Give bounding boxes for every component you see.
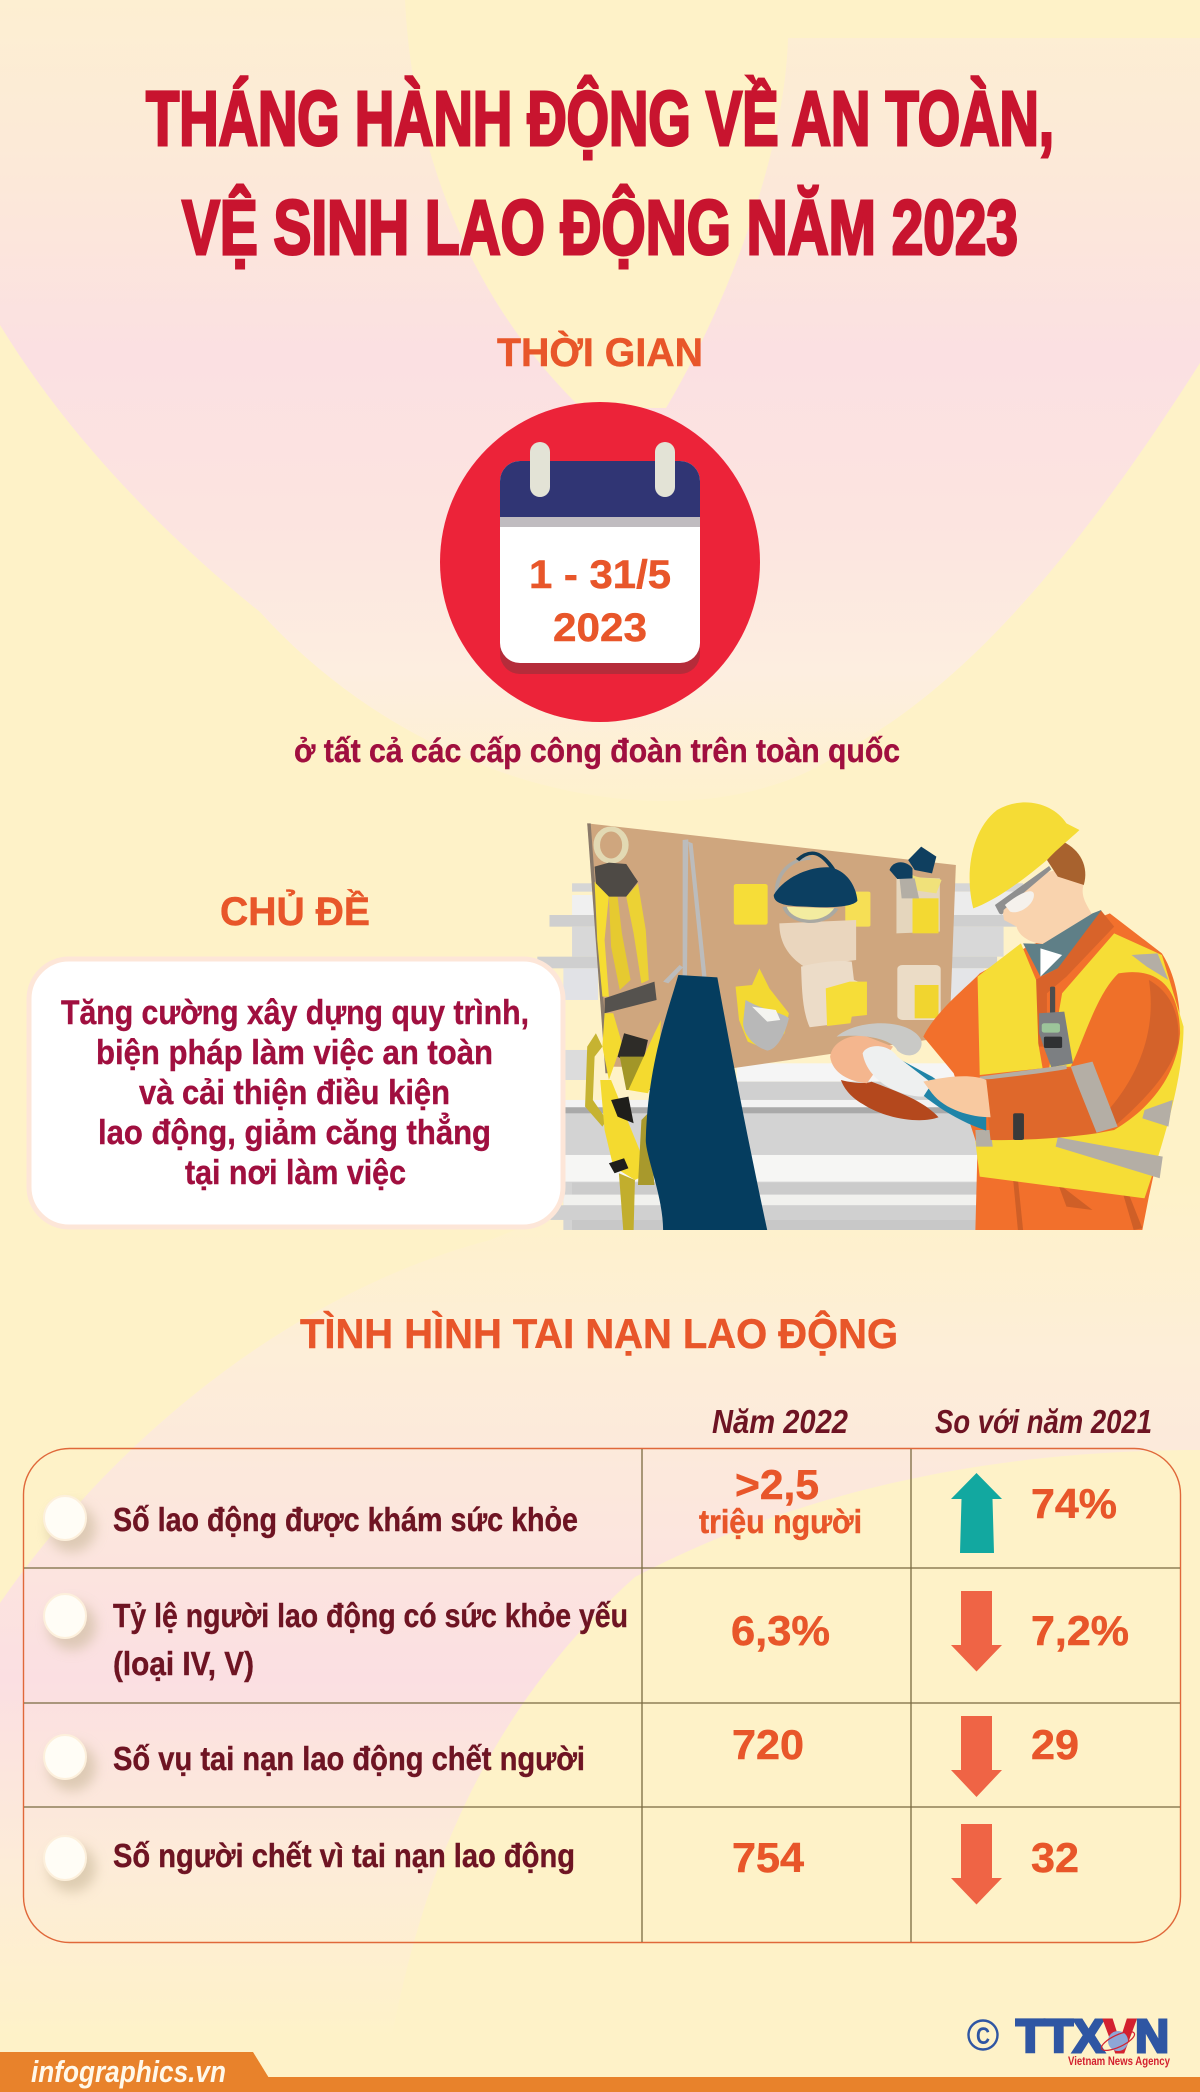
- hair: [1047, 842, 1085, 885]
- footer bar: [0, 2052, 1200, 2092]
- row 1: số lao động được khám sức khỏe: >2,5: [735, 1461, 819, 1508]
- logo: TTXVN: Vietnam News Agency: [1068, 2054, 1170, 2068]
- panel: theme text: tại nơi làm việc: [185, 1154, 406, 1192]
- vest left: [978, 943, 1043, 1075]
- panel: theme text: [29, 959, 563, 1227]
- safety glasses: [995, 866, 1051, 914]
- rod: [663, 839, 706, 983]
- row 4: số người chết vì tai nạn lao động: Số người chết vì tai nạn lao động: [113, 1837, 575, 1874]
- orange suit: [923, 913, 1180, 1230]
- walkie talkie: [1039, 987, 1073, 1067]
- row 4: số người chết vì tai nạn lao động: 32: [1031, 1834, 1079, 1881]
- collar: [1023, 910, 1101, 977]
- heading: chủ đề: CHỦ ĐỀ: [220, 888, 370, 934]
- paper: [863, 1046, 932, 1097]
- row 2: tỷ lệ người lao động có sức khỏe yếu: 6,3%: [731, 1607, 830, 1654]
- clipboard: [889, 1053, 986, 1131]
- paper curl: [837, 1023, 922, 1055]
- row 2: tỷ lệ người lao động có sức khỏe yếu: [44, 1591, 1129, 1682]
- neck and face: [1001, 871, 1093, 944]
- mask bag: [736, 968, 789, 1051]
- illustration: worker with safety equipment: [537, 802, 1184, 1230]
- panel: theme text: lao động, giảm căng thẳng: [98, 1113, 491, 1152]
- right hand: [923, 1076, 991, 1117]
- row 3: số vụ tai nạn lao động chết người: Số vụ tai nạn lao động chết người: [113, 1740, 585, 1777]
- row 1: số lao động được khám sức khỏe: [44, 1461, 1117, 1553]
- left hand: [830, 1036, 893, 1083]
- pegboard: [587, 823, 956, 1073]
- table column headers: [712, 1403, 1152, 1440]
- title: [146, 75, 1054, 271]
- logo: TTXVN: TTXVN: [1016, 2010, 1169, 2062]
- forearm: [984, 1068, 1097, 1140]
- gloves bag: [890, 847, 942, 933]
- panel: theme text: Tăng cường xây dựng quy trình,: [61, 994, 529, 1032]
- logo: TTXVN: [968, 2010, 1170, 2068]
- calendar icon: 2023: [553, 606, 647, 650]
- filter box: [897, 965, 941, 1020]
- row 2: tỷ lệ người lao động có sức khỏe yếu: 7,2%: [1031, 1607, 1129, 1654]
- footer bar: infographics.vn: [31, 2054, 226, 2089]
- row 2: tỷ lệ người lao động có sức khỏe yếu: (loại IV, V): [113, 1645, 254, 1682]
- subtitle: ở tất cả các cấp công đoàn trên toàn quốc: [294, 732, 900, 769]
- row 1: số lao động được khám sức khỏe: Số lao động được khám sức khỏe: [113, 1501, 578, 1538]
- table column headers: Năm 2022: [712, 1403, 849, 1440]
- table frame: [24, 1448, 1180, 1942]
- reflective stripes: [975, 953, 1173, 1178]
- worker: [830, 802, 1184, 1230]
- shelving: [537, 883, 1023, 1230]
- row 1: số lao động được khám sức khỏe: triệu người: [699, 1503, 862, 1540]
- trousers fold: [1012, 1167, 1142, 1230]
- row 4: số người chết vì tai nạn lao động: [44, 1824, 1079, 1904]
- row 3: số vụ tai nạn lao động chết người: 720: [732, 1721, 804, 1768]
- heading: tình hình tai nạn lao động: TÌNH HÌNH TAI NẠN LAO ĐỘNG: [300, 1309, 898, 1357]
- dark left sleeve: [841, 1080, 939, 1120]
- sleeve: [1071, 972, 1180, 1133]
- vest right: [975, 933, 1184, 1198]
- table column headers: So với năm 2021: [935, 1403, 1152, 1440]
- logo: TTXVN: C: [976, 2023, 990, 2050]
- heading: thời gian: THỜI GIAN: [497, 329, 703, 375]
- row 3: số vụ tai nạn lao động chết người: [44, 1716, 1079, 1797]
- panel: theme text: biện pháp làm việc an toàn: [96, 1034, 493, 1072]
- panel: theme text: và cải thiện điều kiện: [139, 1074, 450, 1112]
- row 3: số vụ tai nạn lao động chết người: 29: [1031, 1721, 1079, 1768]
- calendar icon: 1 - 31/5: [529, 553, 671, 597]
- harness: [585, 829, 661, 1230]
- sleeve shade: [1105, 980, 1179, 1127]
- calendar icon: [440, 402, 760, 722]
- face shield: [774, 853, 867, 1027]
- row 1: số lao động được khám sức khỏe: 74%: [1031, 1480, 1117, 1527]
- helmet: [970, 802, 1079, 908]
- apron: [646, 975, 767, 1230]
- row 4: số người chết vì tai nạn lao động: 754: [732, 1834, 805, 1881]
- row 2: tỷ lệ người lao động có sức khỏe yếu: Tỷ lệ người lao động có sức khỏe yếu: [113, 1597, 628, 1634]
